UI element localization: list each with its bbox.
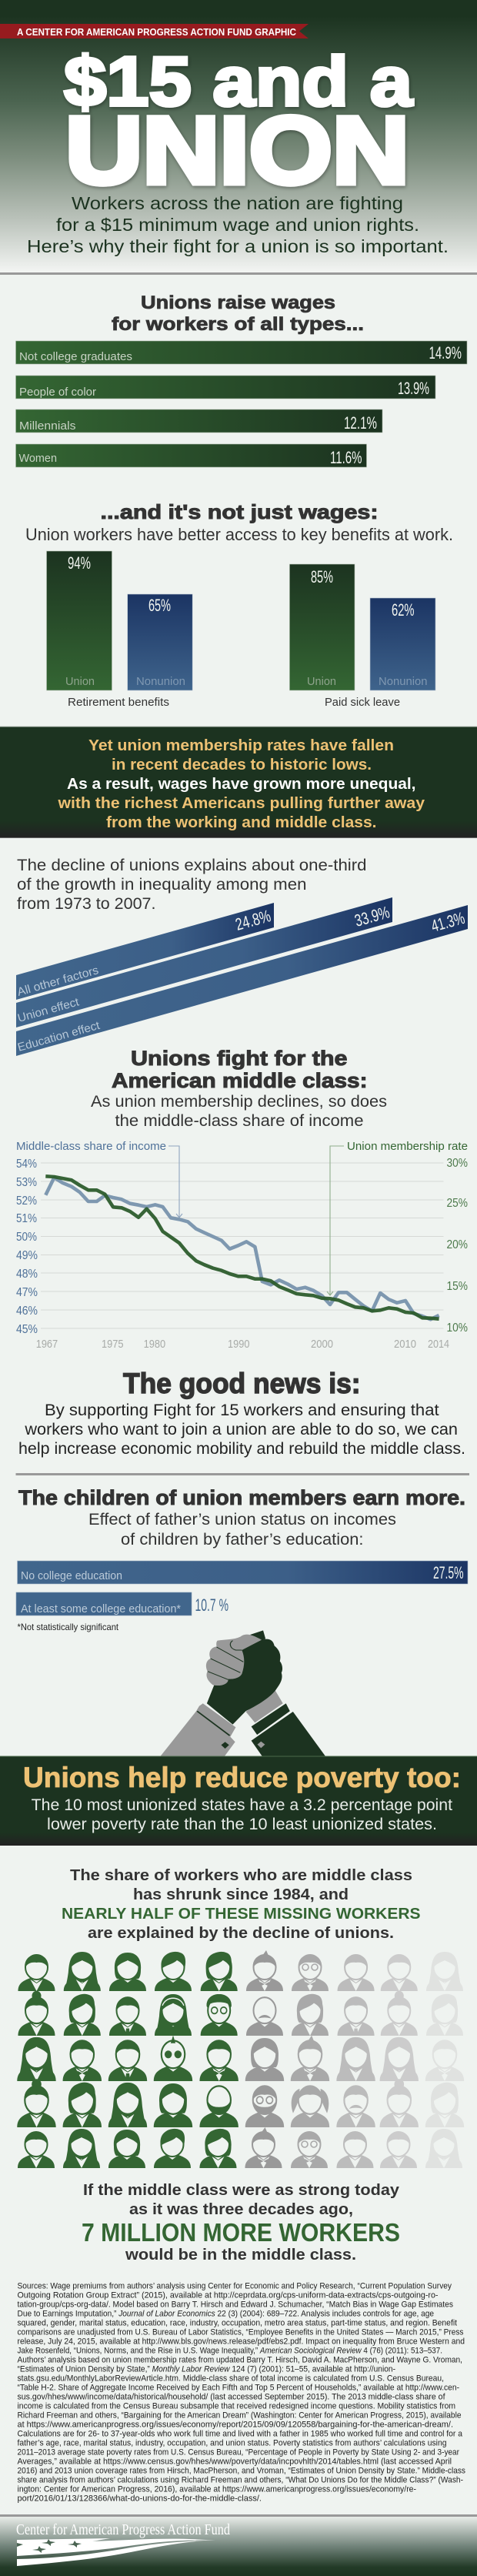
panel: middle class (16, 1047, 468, 1351)
right axis: 20% (446, 1238, 468, 1251)
right axis: 30% (446, 1157, 468, 1170)
text block: The 10 most unionized states have a 3.2 percentage point (32, 1796, 452, 1814)
panel: inequality factors (16, 857, 468, 1056)
line: union membership rate (45, 1176, 439, 1319)
text block: By supporting Fight for 15 workers and ensuring that (45, 1402, 439, 1419)
slanted bar: all other factors: All other factors (16, 964, 100, 999)
x axis: 1990 (228, 1338, 249, 1351)
x axis: 1967 (36, 1338, 58, 1351)
left axis: 52% (16, 1194, 37, 1208)
text block: 7 million more workers: would be in the middle class. (125, 2247, 356, 2264)
x axis: 1975 (102, 1338, 123, 1351)
text block: workers who want to join a union are able to do so, we can (24, 1421, 458, 1438)
text block: sources (17, 2281, 465, 2503)
heading: Unions fight for the (131, 1047, 348, 1070)
slanted bar: all other factors (16, 903, 274, 1000)
bar chart: retirement benefits (46, 551, 192, 709)
heading: Unions raise wages (141, 292, 335, 313)
bar: not college graduates (15, 341, 467, 364)
text block: sources: “Estimates of Union Density by State,” Monthly Labor Review 124 (7) (2001): 51–55, available at http://union- (17, 2364, 395, 2374)
icon row 1 (18, 1950, 463, 1991)
bar chart: paid sick leave: 62% (392, 600, 414, 620)
text block: 7 million more workers: 7 MILLION MORE WORKERS (82, 2218, 400, 2247)
left axis: 47% (16, 1286, 38, 1299)
bar chart: retirement benefits: Nonunion (136, 675, 185, 688)
text block: sources: squared, gender, marital status, education, race, industry, occupation, metro area status, part-time status, and region. Benefit (17, 2318, 457, 2327)
right axis (446, 1157, 468, 1335)
bar chart: retirement benefits: 94% (68, 553, 91, 573)
banner: publisher: A CENTER FOR AMERICAN PROGRESS ACTION FUND GRAPHIC (17, 26, 297, 38)
slanted bar: union effect: Union effect (16, 995, 81, 1025)
text block: 7 million more workers: as it was three decades ago, (129, 2201, 353, 2218)
bar chart: retirement benefits: 65% (148, 596, 171, 615)
legend: union membership (327, 1140, 468, 1295)
text block: sources: father’s age, race, marital status, industry, occupation, and union status. Poverty statistics from authors’ calculations using (17, 2438, 446, 2447)
text block (17, 857, 366, 913)
bar: people of color: 13.9% (398, 379, 429, 398)
right axis: 10% (446, 1321, 468, 1335)
legend: middle-class share (16, 1140, 182, 1218)
footnote: *Not statistically significant (17, 1622, 119, 1632)
icon: clasped hands (160, 1630, 325, 1756)
heading: ...and it's not just wages: (100, 500, 379, 523)
heading: Unions help reduce poverty too: (23, 1762, 461, 1793)
subheading (88, 1511, 396, 1549)
text block: sources: port/2016/01/13/128366/what-do-unions-do-for-the-middle-class/. (17, 2494, 262, 2503)
heading: The children of union members earn more. (18, 1486, 465, 1509)
text block: shrinking middle class: are explained by the decline of unions. (88, 1925, 394, 1942)
left axis: 45% (16, 1323, 38, 1336)
bar: no college education (17, 1561, 468, 1584)
left axis (16, 1158, 38, 1336)
left axis: 54% (16, 1158, 37, 1171)
text block: sources: sus.gov/hhes/www/income/data/historical/household/ (last accessed September 2015). The 2013 middle-class share of (17, 2392, 445, 2401)
bar: millennials (15, 409, 382, 433)
bar chart: retirement benefits: Retirement benefits (68, 696, 169, 709)
text block: shrinking middle class: has shrunk since 1984, and (133, 1886, 349, 1903)
title: $15 and a (64, 43, 414, 121)
slanted bar: education effect (16, 905, 468, 1056)
left axis: 48% (16, 1268, 38, 1281)
slanted bar: all other factors: 24.8% (233, 906, 273, 934)
text block: shrinking middle class: NEARLY HALF OF THESE MISSING WORKERS (62, 1906, 420, 1923)
text block (32, 1796, 452, 1833)
bar chart: retirement benefits: Union (65, 675, 95, 688)
heading (112, 292, 364, 335)
icon: flag logo (17, 2538, 215, 2566)
line chart (16, 1140, 468, 1351)
bar: no college education: No college education (21, 1569, 122, 1582)
text block: lower poverty rate than the 10 least unionized states. (47, 1816, 437, 1833)
subheading: Union workers have better access to key benefits at work. (25, 525, 453, 544)
left axis: 46% (16, 1305, 38, 1318)
panel: historic lows callout: Yet union membership rates have fallen (88, 737, 394, 754)
right axis: 25% (446, 1197, 468, 1210)
text block: sources: Outgoing Rotation Group Extract” (2015), available at http://ceprdata.org/cps-uniform-data-extracts/cps-outgoing-ro- (17, 2290, 439, 2300)
bar: people of color (15, 376, 435, 399)
panel: historic lows callout: in recent decades to historic lows. (112, 757, 372, 773)
panel: benefits (25, 500, 453, 709)
bar: not college graduates: 14.9% (429, 343, 462, 363)
title: UNION (65, 98, 409, 204)
x axis: 2014 (428, 1338, 449, 1351)
bar: millennials: 12.1% (344, 413, 377, 433)
panel: historic lows callout: from the working and middle class. (106, 814, 377, 831)
subheading: As union membership declines, so does (91, 1093, 387, 1111)
bar: at least some college: 10.7 % (195, 1595, 228, 1615)
icon row 3 (17, 2036, 464, 2081)
panel: footer (0, 2514, 477, 2576)
text block: 7 million more workers: If the middle class were as strong today (83, 2182, 400, 2199)
subheading: of children by father’s education: (121, 1531, 363, 1549)
text block: of the growth in inequality among men (17, 876, 306, 894)
text block: 7 million more workers (82, 2182, 400, 2264)
subtitle: Workers across the nation are fighting (72, 193, 403, 213)
bar: women: Women (18, 452, 57, 465)
text block: sources: at https://www.americanprogress.org/issues/economy/report/2015/09/09/120558/bargaining-for-the-american-dream/. (17, 2420, 453, 2429)
text block: sources: stats.gsu.edu/MonthlyLaborReviewArticle.htm. Middle-class share of total income is calculated from U.S. Census Bureau, (17, 2374, 444, 2383)
bar: women (15, 444, 366, 467)
legend: union membership: Union membership rate (347, 1140, 468, 1153)
text block: sources: Sources: Wage premiums from authors’ analysis using Center for Economic and Policy Research, “Current Population Survey (17, 2281, 452, 2290)
panel: historic lows callout: with the richest Americans pulling further away (57, 795, 425, 812)
line: middle-class share of income (45, 1178, 439, 1319)
text block: sources: income is calculated from the Census Bureau subsample that received redesigned income questions. Mobility statistics from (17, 2401, 455, 2411)
subheading (91, 1093, 387, 1130)
text block (18, 1402, 465, 1458)
text block: sources: Due to Earnings Imputation,” Journal of Labor Economics 22 (3) (2004): 689–722. Analysis includes controls for age, age (17, 2309, 434, 2318)
text block: sources: ington: Center for American Progress, 2016), available at https://www.americanprogress.org/issues/economy/re- (17, 2484, 416, 2494)
bar chart: paid sick leave: 85% (311, 567, 333, 586)
panel: historic lows callout (0, 727, 477, 838)
bar chart: paid sick leave: Union (307, 675, 336, 688)
text block: sources: tation-group/cps-org-data/. Model based on Barry T. Hirsch and Edward J. Schumacher, “Match Bias in Wage Gap Estimates (17, 2300, 453, 2309)
icon row 2 (18, 1991, 463, 2036)
text block: sources: Calculations are for 26- to 37-year-olds who work full time and lived with a father in 1985 who worked full time and control for a (17, 2429, 463, 2438)
text block: sources: Jake Rosenfeld, “Unions, Norms, and the Rise in U.S. Wage Inequality,” American Sociological Review 4 (76) (2011): 513–537. (17, 2346, 442, 2355)
left axis: 50% (16, 1231, 37, 1244)
bar: millennials: Millennials (19, 419, 75, 433)
slanted bar: union effect (16, 897, 392, 1027)
text block: The decline of unions explains about one-third (17, 857, 366, 874)
slanted bar: education effect: Education effect (16, 1019, 102, 1054)
subheading: the middle-class share of income (115, 1112, 364, 1130)
panel: poverty callout (0, 1756, 477, 1846)
subtitle: for a $15 minimum wage and union rights. (56, 215, 419, 235)
subtitle: Here’s why their fight for a union is so important. (27, 236, 449, 256)
heading: American middle class: (112, 1069, 368, 1092)
text block: shrinking middle class: The share of workers who are middle class (70, 1867, 412, 1884)
panel: good news (18, 1368, 465, 1458)
heading: for workers of all types... (112, 314, 364, 335)
text block: sources: Averages,” available at https://www.census.gov/hhes/www/poverty/data/incpovhlth/2014/tables.html (last accessed April (17, 2457, 452, 2466)
icon row 5 (18, 2127, 462, 2168)
panel: historic lows callout: As a result, wages have grown more unequal, (67, 776, 415, 793)
bar: not college graduates: Not college graduates (19, 350, 132, 363)
panel: header (0, 0, 477, 275)
left axis: 53% (16, 1176, 37, 1189)
right axis: 15% (446, 1280, 468, 1293)
x axis: 2000 (311, 1338, 333, 1351)
panel: wages by worker type (15, 292, 467, 467)
panel: children of union members (16, 1486, 468, 1632)
text block: help increase economic mobility and rebuild the middle class. (18, 1440, 465, 1458)
x axis (36, 1338, 449, 1351)
left axis: 49% (16, 1249, 38, 1262)
bar chart: paid sick leave: Nonunion (379, 675, 428, 688)
subheading: Effect of father’s union status on incomes (88, 1511, 396, 1529)
bar: at least some college (16, 1592, 228, 1615)
left axis: 51% (16, 1212, 37, 1225)
title (64, 43, 414, 204)
heading: The good news is: (123, 1368, 361, 1399)
bar chart: paid sick leave: Paid sick leave (325, 696, 400, 709)
icon grid: workers (17, 1950, 464, 2168)
slanted bar: union effect: 33.9% (352, 902, 392, 931)
heading (112, 1047, 368, 1092)
footer logo text: Center for American Progress Action Fund (16, 2521, 230, 2538)
x axis: 2010 (394, 1338, 416, 1351)
bar: at least some college: At least some college education* (21, 1602, 181, 1615)
subtitle (27, 193, 449, 256)
text block: from 1973 to 2007. (17, 895, 155, 913)
legend: middle-class share: Middle-class share of income (16, 1140, 166, 1153)
bar chart: paid sick leave (289, 564, 435, 709)
icon row 4 (17, 2079, 464, 2127)
bar: women: 11.6% (330, 448, 362, 467)
bar: people of color: People of color (19, 386, 96, 399)
x axis: 1980 (144, 1338, 165, 1351)
text block: shrinking middle class (62, 1867, 420, 1942)
